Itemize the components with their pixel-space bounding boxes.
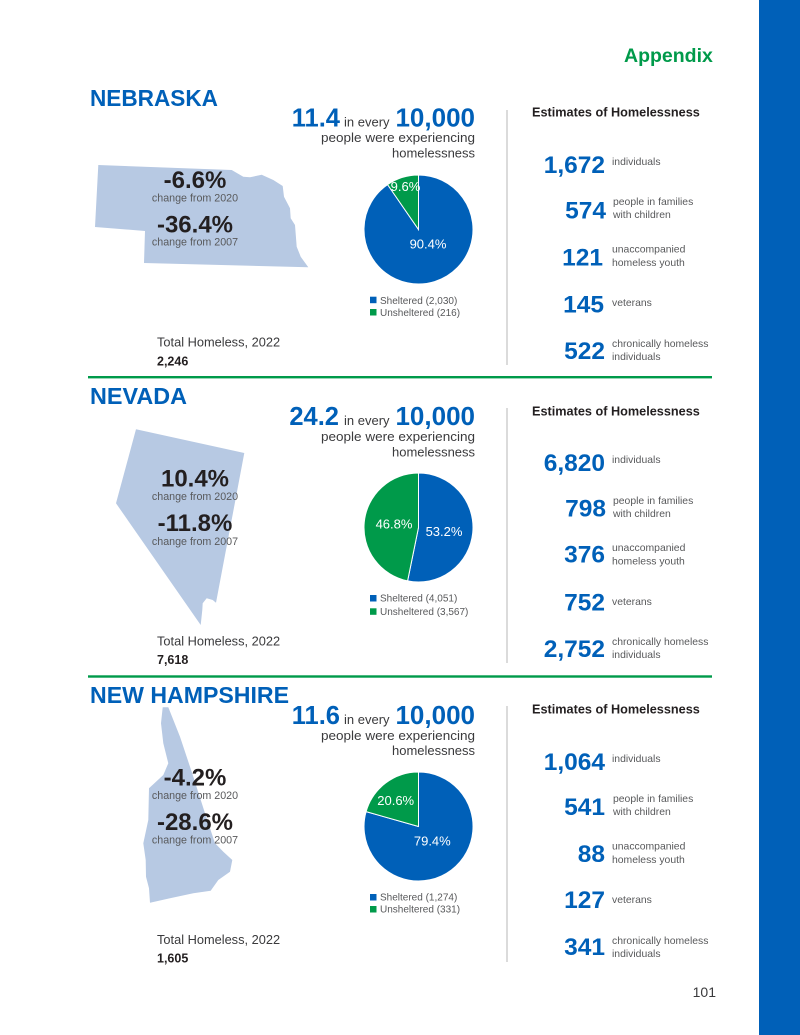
pie legend: Unsheltered (216) <box>380 308 460 319</box>
change from 2020: -6.6% <box>164 167 226 194</box>
estimates heading: Estimates of Homelessness <box>532 106 700 120</box>
total homeless: 2,246 <box>157 355 188 369</box>
change from 2020: change from 2020 <box>152 193 238 205</box>
change from 2007 <box>152 510 238 548</box>
estimate: youth: 121 <box>562 245 603 272</box>
total homeless: Total Homeless, 2022 <box>157 335 280 350</box>
pie chart: Nevada: 46.8% <box>376 516 413 531</box>
estimate: individuals: individuals <box>612 455 661 466</box>
pie legend: Sheltered (2,030) <box>380 296 457 307</box>
estimate: youth: homeless youth <box>612 855 685 866</box>
total homeless: Total Homeless, 2022 <box>157 634 280 649</box>
rate statement <box>289 401 475 460</box>
estimate: youth: 376 <box>564 542 605 569</box>
estimate: chronic: individuals <box>612 949 661 960</box>
change from 2020 <box>152 167 238 205</box>
rate statement: 10,000 <box>395 401 475 431</box>
pie chart: New Hampshire: 20.6% <box>377 793 415 808</box>
estimate: families <box>564 794 693 821</box>
estimate: veterans: veterans <box>612 895 652 906</box>
pie chart: Nebraska <box>364 175 473 284</box>
panel: Nebraska <box>90 85 708 369</box>
estimate: veterans: 145 <box>563 291 604 318</box>
total homeless: 7,618 <box>157 653 188 667</box>
estimate: families: 574 <box>565 197 606 224</box>
rate statement: in every <box>344 712 390 727</box>
change from 2020: change from 2020 <box>152 491 238 503</box>
rate statement: 10,000 <box>395 103 475 133</box>
estimate: youth: homeless youth <box>612 556 685 568</box>
estimate: families <box>565 495 693 522</box>
change from 2007: -36.4% <box>157 212 233 239</box>
rate statement: homelessness <box>392 743 475 758</box>
rate statement: homelessness <box>392 146 475 160</box>
state title: Nevada: NEVADA <box>90 383 187 409</box>
total homeless: 1,605 <box>157 952 188 966</box>
estimate: families: with children <box>612 509 671 520</box>
rate statement: people were experiencing <box>321 130 475 145</box>
pie legend <box>370 296 460 319</box>
rate statement: people were experiencing <box>321 429 475 444</box>
state title: New Hampshire: NEW HAMPSHIRE <box>90 682 289 708</box>
estimate: individuals: 1,064 <box>544 749 605 776</box>
estimate: chronic <box>564 934 708 961</box>
estimate: families <box>565 197 693 224</box>
estimate: individuals <box>544 450 661 477</box>
appendix heading: Appendix <box>624 45 713 67</box>
rate statement: 24.2 <box>289 403 339 431</box>
rate statement: 11.4 <box>292 105 341 133</box>
estimate: veterans <box>564 887 652 914</box>
estimate: individuals <box>544 152 661 179</box>
change from 2007: -28.6% <box>157 809 233 836</box>
rate statement: in every <box>344 115 390 130</box>
estimate: chronic <box>564 338 708 365</box>
estimate: youth <box>564 542 686 569</box>
change from 2020 <box>152 466 238 503</box>
total homeless <box>157 634 280 667</box>
estimate: chronic <box>544 636 708 663</box>
estimate: youth: unaccompanied <box>612 244 686 255</box>
estimate: youth: unaccompanied <box>612 543 686 554</box>
estimate: veterans: veterans <box>612 298 652 309</box>
estimate: chronic: 522 <box>564 338 605 365</box>
change from 2020 <box>152 765 238 802</box>
page number: 101 <box>693 984 716 1000</box>
estimate: families: people in families <box>613 794 693 805</box>
state map: Nevada <box>116 429 244 625</box>
change from 2020: 10.4% <box>161 466 229 493</box>
estimate: families: people in families <box>613 197 693 208</box>
rate statement: homelessness <box>392 445 475 460</box>
estimate: individuals: 1,672 <box>544 152 605 179</box>
change from 2007: change from 2007 <box>152 237 238 249</box>
pie legend: Unsheltered (331) <box>380 905 460 916</box>
pie legend: Unsheltered (3,567) <box>380 607 468 618</box>
estimate: youth: homeless youth <box>612 258 685 269</box>
change from 2020: change from 2020 <box>152 790 238 802</box>
panel: New Hampshire <box>90 682 708 966</box>
estimate: veterans: 127 <box>564 887 605 914</box>
state map: New Hampshire <box>143 707 232 903</box>
estimate: veterans <box>563 291 652 318</box>
pie chart: Nebraska: 9.6% <box>391 179 421 194</box>
pie legend: Sheltered (4,051) <box>380 594 457 605</box>
state map: Nebraska <box>95 165 308 267</box>
estimate: chronic: individuals <box>612 650 661 661</box>
pie legend <box>370 893 460 916</box>
pie chart: Nevada: 53.2% <box>426 524 463 539</box>
change from 2007: change from 2007 <box>152 834 238 846</box>
rate statement: in every <box>344 413 390 428</box>
estimate: chronic: chronically homeless <box>612 339 708 350</box>
estimate: chronic: chronically homeless <box>612 637 708 648</box>
panel: Nevada <box>90 383 708 667</box>
change from 2007 <box>152 212 238 249</box>
estimate: veterans: 752 <box>564 589 605 616</box>
estimate: youth <box>562 244 686 272</box>
estimate: youth: 88 <box>578 841 605 868</box>
estimate: chronic: chronically homeless <box>612 936 708 947</box>
estimate: chronic: individuals <box>612 352 661 363</box>
rate statement: people were experiencing <box>321 728 475 743</box>
estimate: youth: unaccompanied <box>612 842 686 852</box>
estimate: families: with children <box>612 807 671 818</box>
change from 2007: -11.8% <box>158 510 232 537</box>
estimate: families: 541 <box>564 794 605 821</box>
pie chart: Nebraska: 90.4% <box>410 237 447 252</box>
pie chart: New Hampshire: 79.4% <box>414 834 451 849</box>
total homeless <box>157 335 280 369</box>
state title: Nebraska: NEBRASKA <box>90 85 218 111</box>
blue side bar <box>759 0 800 1035</box>
pie chart: New Hampshire <box>364 772 473 881</box>
rate statement <box>292 103 475 160</box>
total homeless <box>157 932 280 966</box>
change from 2007: change from 2007 <box>152 536 238 548</box>
pie chart: Nevada <box>364 473 473 582</box>
pie legend <box>370 594 468 618</box>
estimate: individuals <box>544 749 661 776</box>
estimate: individuals: individuals <box>612 754 661 765</box>
rate statement <box>292 700 475 758</box>
pie legend: Sheltered (1,274) <box>380 893 457 904</box>
rate statement: 11.6 <box>292 702 340 730</box>
estimate: chronic: 2,752 <box>544 636 605 663</box>
total homeless: Total Homeless, 2022 <box>157 932 280 947</box>
estimate: families: with children <box>612 210 671 221</box>
estimate: veterans: veterans <box>612 597 652 608</box>
estimate: individuals: individuals <box>612 157 661 168</box>
estimates heading: Estimates of Homelessness <box>532 404 700 418</box>
estimates heading: Estimates of Homelessness <box>532 702 700 716</box>
estimate: youth <box>578 841 686 868</box>
estimate: chronic: 341 <box>564 934 605 961</box>
rate statement: 10,000 <box>395 700 475 730</box>
estimate: families: people in families <box>613 496 693 507</box>
estimate: families: 798 <box>565 495 606 522</box>
estimate: veterans <box>564 589 652 616</box>
change from 2007 <box>152 809 238 846</box>
change from 2020: -4.2% <box>164 765 226 792</box>
estimate: individuals: 6,820 <box>544 450 605 477</box>
